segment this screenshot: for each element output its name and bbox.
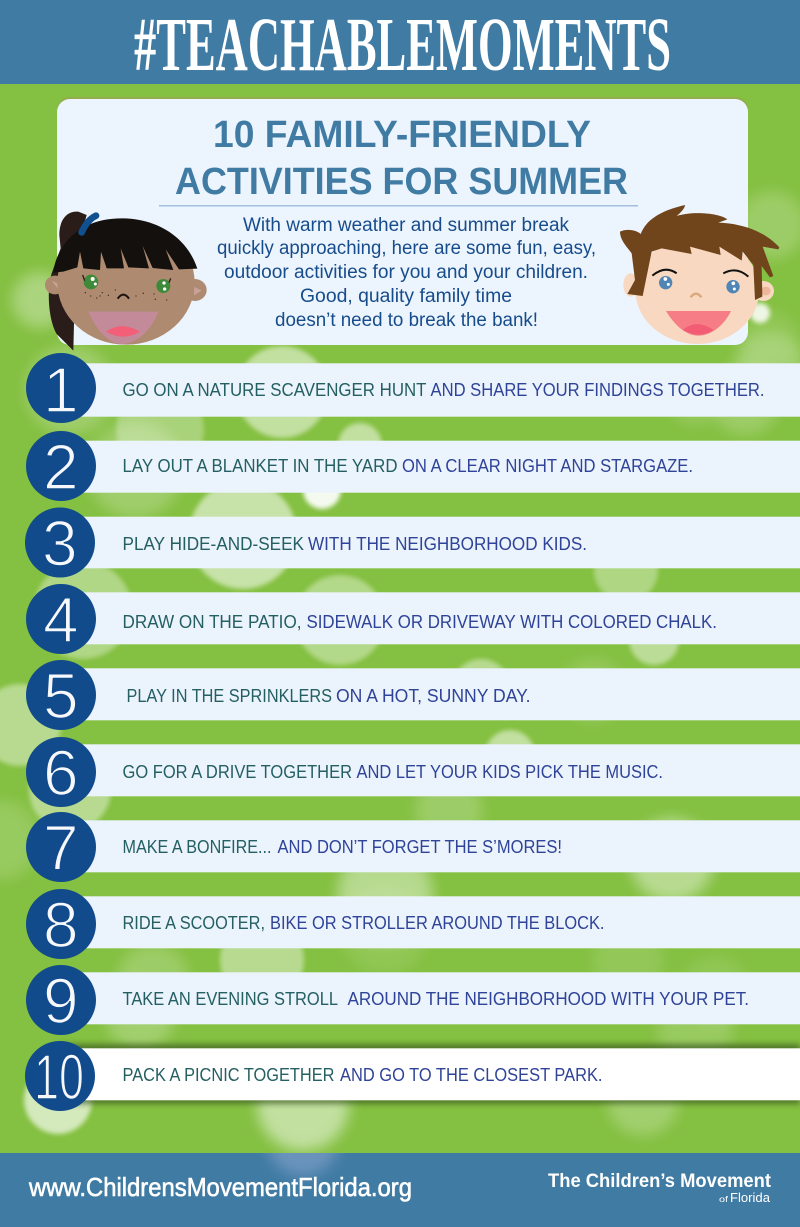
activity 2 — [26, 431, 800, 503]
activity 5: PLAY IN THE SPRINKLERS — [126, 686, 332, 706]
intro text: doesn’t need to break the bank! — [275, 310, 538, 331]
activity 8: 8 — [43, 889, 79, 961]
activity 9: TAKE AN EVENING STROLL — [122, 989, 338, 1009]
panel heading: ACTIVITIES FOR SUMMER — [175, 161, 628, 203]
footer bar — [0, 1104, 800, 1227]
activity 3 — [25, 508, 800, 580]
icon: girl face — [45, 212, 207, 351]
activity 9: 9 — [43, 965, 79, 1037]
activity 2: ON A CLEAR NIGHT AND STARGAZE. — [402, 456, 693, 476]
organisation logo: of — [719, 1195, 729, 1204]
activity 7: MAKE A BONFIRE... — [122, 837, 272, 857]
activity 6 — [26, 737, 800, 809]
activity 3: PLAY HIDE-AND-SEEK — [122, 534, 304, 554]
intro text: quickly approaching, here are some fun, easy, — [217, 238, 596, 259]
activity 1 — [26, 353, 800, 426]
activity 5 — [26, 660, 800, 732]
organisation logo: The Children’s Movement — [548, 1171, 772, 1192]
activity 7: AND DON’T FORGET THE S’MORES! — [278, 837, 562, 857]
intro text: Good, quality family time — [300, 286, 512, 307]
activity 7 — [26, 812, 800, 884]
activity 2: LAY OUT A BLANKET IN THE YARD — [122, 456, 398, 476]
website url: www.ChildrensMovementFlorida.org — [28, 1172, 412, 1202]
activity 4 — [26, 584, 800, 656]
activity 10: 10 — [34, 1041, 84, 1113]
intro panel — [57, 97, 748, 345]
activity 10 — [25, 1041, 800, 1113]
activity 10: PACK A PICNIC TOGETHER — [122, 1065, 334, 1085]
activity 6: AND LET YOUR KIDS PICK THE MUSIC. — [356, 762, 663, 782]
activity 7: 7 — [43, 812, 79, 884]
activity 5: ON A HOT, SUNNY DAY. — [336, 686, 530, 706]
activity 6: 6 — [43, 737, 79, 809]
intro text: outdoor activities for you and your children. — [224, 262, 588, 283]
header bar — [0, 0, 800, 87]
intro text: With warm weather and summer break — [243, 215, 569, 236]
activity 4: DRAW ON THE PATIO, — [122, 612, 302, 632]
intro text — [217, 215, 596, 331]
activity 3: WITH THE NEIGHBORHOOD KIDS. — [308, 534, 587, 554]
icon: boy face — [620, 205, 779, 344]
organisation logo: Florida — [730, 1190, 771, 1205]
activity 4: 4 — [43, 584, 79, 656]
panel heading — [175, 114, 628, 203]
activity 8: BIKE OR STROLLER AROUND THE BLOCK. — [270, 913, 604, 933]
activity 9: AROUND THE NEIGHBORHOOD WITH YOUR PET. — [348, 989, 749, 1009]
activity 1: 1 — [43, 354, 79, 426]
activity 6: GO FOR A DRIVE TOGETHER — [122, 762, 352, 782]
activity 3: 3 — [42, 508, 78, 580]
activity 10: AND GO TO THE CLOSEST PARK. — [340, 1065, 602, 1085]
bokeh background lights, soft — [0, 191, 800, 1151]
panel heading: 10 FAMILY-FRIENDLY — [213, 114, 591, 156]
activity 8: RIDE A SCOOTER, — [122, 913, 265, 933]
bokeh background lights, defined — [0, 303, 770, 1134]
activity 5: 5 — [43, 660, 79, 732]
activity 9 — [26, 965, 800, 1037]
activity 2: 2 — [43, 431, 79, 503]
activity 8 — [26, 889, 800, 961]
activity 4: SIDEWALK OR DRIVEWAY WITH COLORED CHALK. — [306, 612, 717, 632]
activity 1: AND SHARE YOUR FINDINGS TOGETHER. — [430, 380, 764, 400]
organisation logo — [548, 1171, 772, 1205]
activity 1: GO ON A NATURE SCAVENGER HUNT — [122, 380, 426, 400]
